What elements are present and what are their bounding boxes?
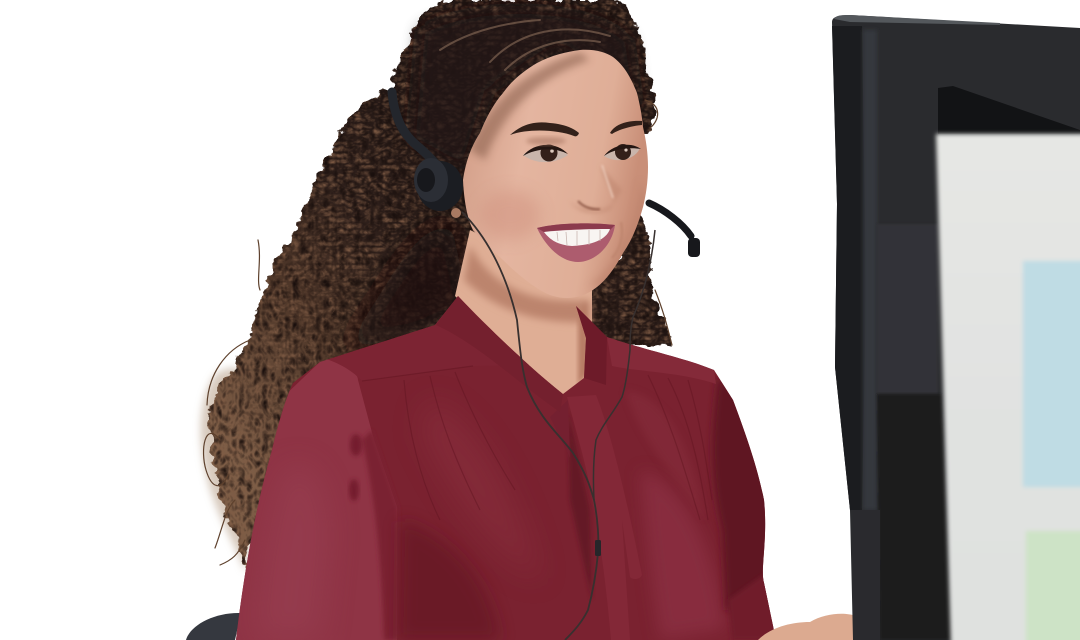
lips <box>537 223 615 262</box>
top edge highlight <box>834 15 1000 25</box>
headset <box>392 92 700 640</box>
nose <box>569 165 622 213</box>
centre placket shadow <box>568 420 592 590</box>
microphone boom <box>649 203 691 236</box>
screen <box>936 134 1080 640</box>
nostril <box>578 201 600 209</box>
cheek blush <box>480 190 540 240</box>
cable left <box>462 212 598 640</box>
neck <box>455 230 592 402</box>
microphone tip <box>688 238 700 257</box>
shoulder yoke <box>324 296 530 381</box>
face shading <box>470 52 650 290</box>
dark crown <box>410 9 640 170</box>
mid bevel <box>863 30 877 510</box>
teeth gaps <box>557 230 600 245</box>
left edge strip <box>832 26 866 510</box>
sleeve crease spots <box>350 434 362 456</box>
cable right <box>593 230 655 500</box>
tie tails <box>567 395 642 640</box>
main hair mass <box>211 0 656 570</box>
screen recess <box>938 86 1080 134</box>
middle panel band <box>877 224 938 394</box>
green window <box>1026 531 1080 640</box>
wispy pale curls lower left <box>201 368 270 572</box>
lower side <box>853 510 880 640</box>
face <box>463 50 650 298</box>
smile crease <box>612 222 622 258</box>
earpiece <box>417 161 463 211</box>
hairline shadow <box>470 52 590 160</box>
inline control <box>595 540 601 556</box>
cheek shadow right <box>594 196 646 286</box>
left collar fold <box>458 296 563 394</box>
left sleeve <box>220 358 397 640</box>
left eye <box>523 137 568 162</box>
upper lip <box>537 223 615 232</box>
headband <box>392 92 438 168</box>
tie loop <box>550 400 570 458</box>
blouse <box>220 296 790 640</box>
right bust highlight <box>644 478 720 636</box>
right cuff <box>730 576 774 638</box>
blouse shading <box>220 296 790 640</box>
hand <box>758 614 856 640</box>
gather folds <box>362 366 712 520</box>
monitor <box>832 15 1080 640</box>
loose curl strands <box>204 100 672 565</box>
lower panel shadow <box>877 394 952 640</box>
right collar fold <box>576 306 607 385</box>
sleeve highlight <box>255 465 330 640</box>
blue window <box>1023 261 1080 487</box>
right sleeve shadow <box>710 376 770 612</box>
right eye <box>604 144 641 160</box>
left eyebrow <box>510 122 579 136</box>
right yoke <box>607 337 716 384</box>
sleeve dark fold <box>362 430 398 640</box>
right eyebrow <box>610 121 642 134</box>
chair back <box>186 613 241 640</box>
nose highlight <box>602 165 613 198</box>
hair <box>201 0 673 572</box>
torso shadow <box>398 520 500 640</box>
right chest folds <box>625 390 705 520</box>
teeth <box>544 229 610 246</box>
jack <box>451 208 461 218</box>
dark hair by collar <box>340 220 470 350</box>
lower right curls <box>575 210 673 347</box>
torso highlight <box>463 462 477 484</box>
hair crown highlight strands <box>440 20 610 70</box>
